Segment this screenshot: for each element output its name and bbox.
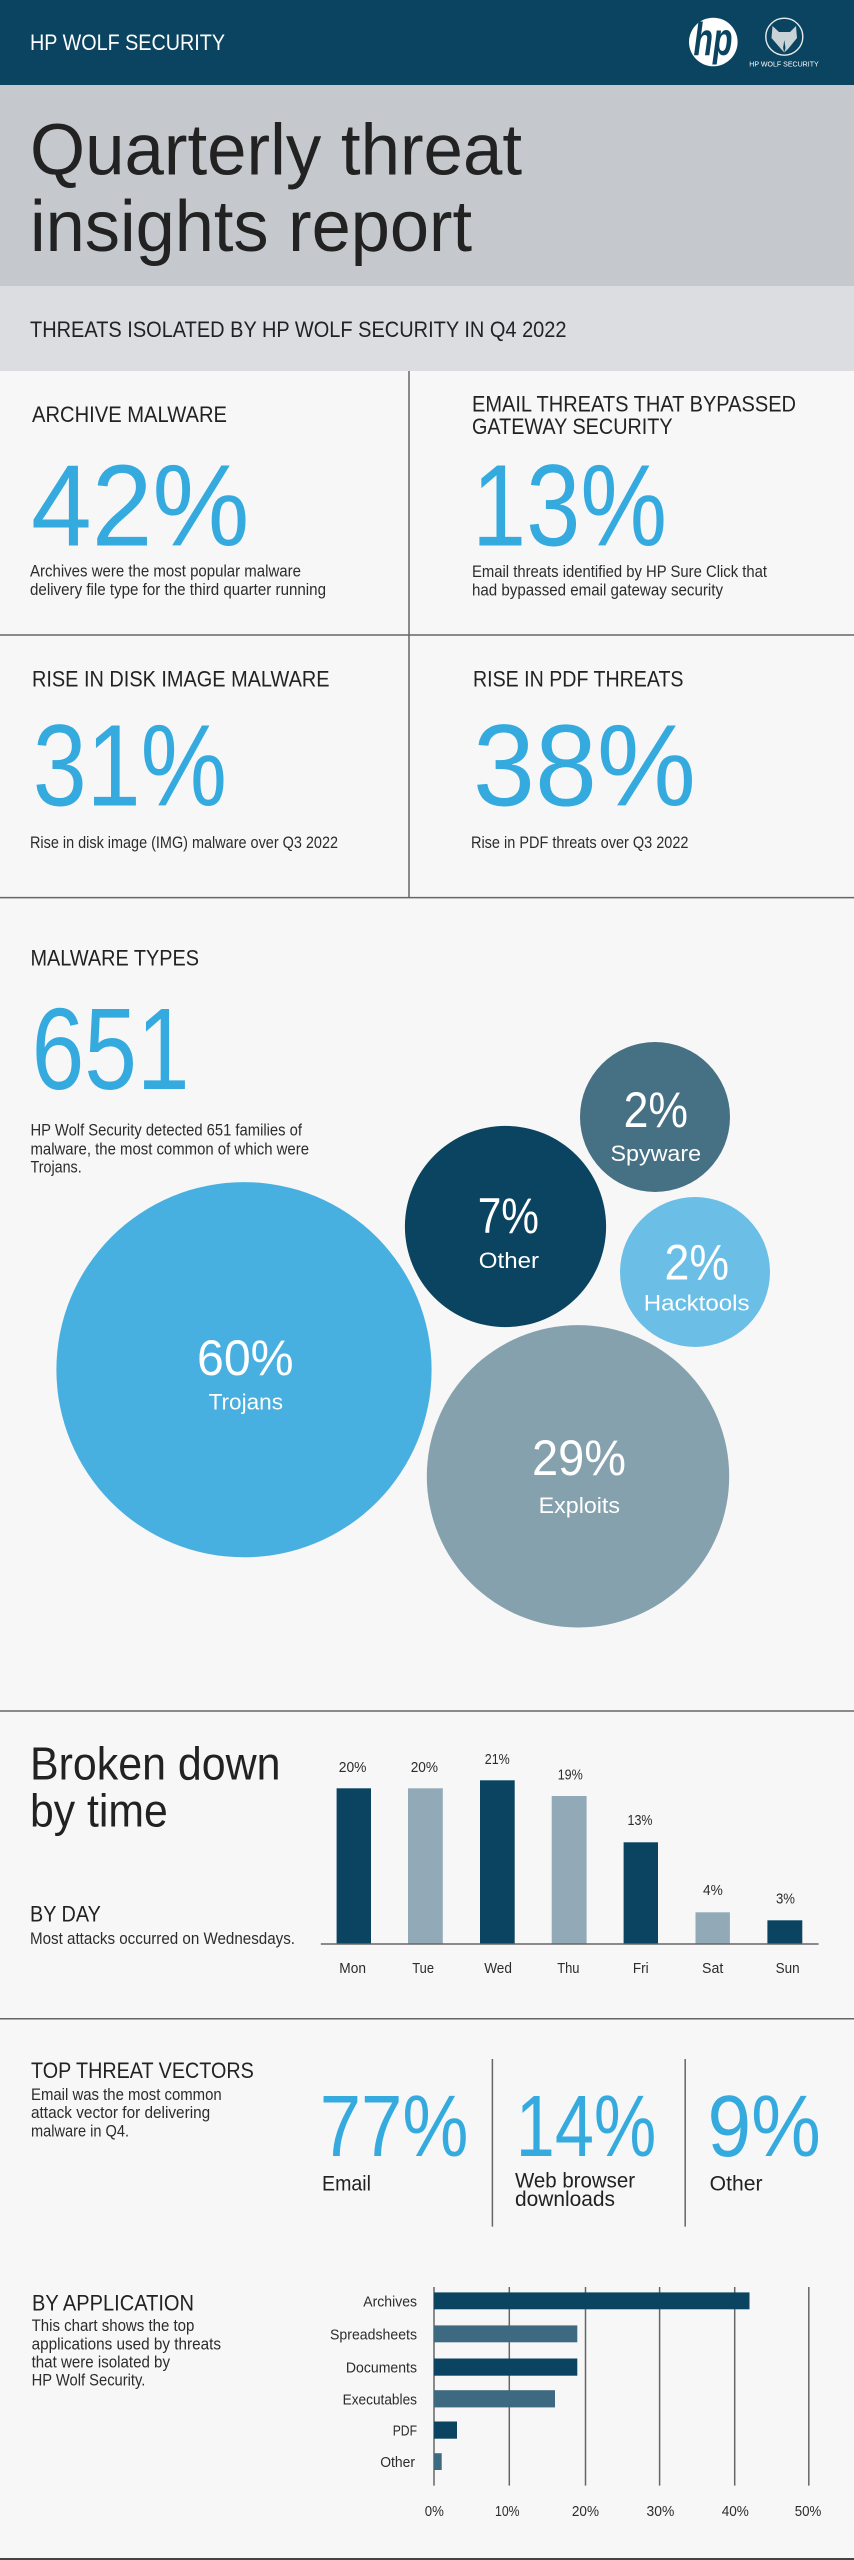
bar chart: attacks by day xyxy=(321,1752,819,1977)
panel: email threats: 13% xyxy=(472,440,667,570)
panel: archive malware: delivery file type for the third quarter running xyxy=(30,581,326,599)
text block: top threat vectors: attack vector for delivering xyxy=(31,2104,210,2122)
bubble: other: 7% xyxy=(478,1188,539,1244)
bar chart: threats by application: 40% xyxy=(722,2504,749,2520)
panel: email threats: GATEWAY SECURITY xyxy=(472,414,673,439)
bar chart: threats by application: 10% xyxy=(495,2504,520,2520)
bar chart: attacks by day: Mon xyxy=(339,1961,366,1977)
stat: web browser downloads 14%: downloads xyxy=(515,2188,615,2211)
bar chart: threats by application: Other xyxy=(380,2455,415,2471)
text block: by application: BY APPLICATION xyxy=(32,2290,194,2315)
panel: malware types intro: malware, the most common of which were xyxy=(30,1140,309,1158)
bar chart: attacks by day: 20% xyxy=(411,1760,438,1776)
panel: disk image malware: RISE IN DISK IMAGE MALWARE xyxy=(32,667,330,692)
bubble: hacktools: 2% xyxy=(664,1234,729,1290)
panel: malware types intro: 651 xyxy=(32,984,190,1114)
stat: web browser downloads 14% xyxy=(515,2078,656,2211)
stat: other 9%: 9% xyxy=(708,2078,821,2175)
panel: disk image malware xyxy=(30,667,338,852)
bar chart: attacks by day: 13% xyxy=(628,1813,653,1829)
title band: Quarterly threat xyxy=(30,111,522,191)
panel: PDF threats: RISE IN PDF THREATS xyxy=(473,667,684,692)
text block: by application xyxy=(32,2290,221,2390)
text block: top threat vectors xyxy=(31,2058,254,2140)
text block: by day: Most attacks occurred on Wednesdays. xyxy=(30,1930,295,1948)
text block: top threat vectors: malware in Q4. xyxy=(31,2122,129,2140)
bar chart: attacks by day: 3% xyxy=(776,1891,795,1907)
title band: insights report xyxy=(30,187,472,267)
bubble: exploits xyxy=(427,1325,729,1628)
icon: HP logo: hp xyxy=(694,13,732,65)
bubble: other xyxy=(405,1126,606,1327)
bubble: hacktools xyxy=(620,1197,770,1347)
bar chart: attacks by day: Thu xyxy=(557,1961,580,1977)
heading: broken down by time: Broken down xyxy=(30,1737,280,1789)
heading: broken down by time xyxy=(30,1737,280,1837)
panel: archive malware: 42% xyxy=(31,440,250,570)
bubble: trojans xyxy=(56,1182,432,1557)
header bar xyxy=(0,0,854,85)
bar chart: threats by application: Spreadsheets xyxy=(330,2328,417,2344)
bubble: spyware xyxy=(580,1042,730,1192)
bar chart: threats by application: 50% xyxy=(795,2504,821,2520)
bubble: exploits: Exploits xyxy=(539,1493,620,1518)
bubble: other: Other xyxy=(479,1248,539,1273)
panel: email threats: Email threats identified by HP Sure Click that xyxy=(472,563,767,581)
bar chart: threats by application xyxy=(330,2287,821,2520)
heading: broken down by time: by time xyxy=(30,1785,168,1837)
panel: malware types intro xyxy=(30,946,309,1177)
bar chart: threats by application: 0% xyxy=(425,2504,444,2520)
text block: top threat vectors: TOP THREAT VECTORS xyxy=(31,2058,254,2083)
panel: malware types intro: Trojans. xyxy=(30,1159,82,1177)
subtitle band: THREATS ISOLATED BY HP WOLF SECURITY IN Q4 2022 xyxy=(30,317,566,342)
text block: by application: This chart shows the top xyxy=(32,2317,194,2335)
bar chart: threats by application: 20% xyxy=(572,2504,599,2520)
panel: disk image malware: Rise in disk image (IMG) malware over Q3 2022 xyxy=(30,834,338,852)
text block: by application: applications used by threats xyxy=(32,2336,221,2354)
panel: malware types intro: MALWARE TYPES xyxy=(30,946,199,971)
text block: by application: that were isolated by xyxy=(32,2354,171,2372)
bubble: spyware: Spyware xyxy=(610,1141,701,1166)
bubble: hacktools: Hacktools xyxy=(644,1291,750,1316)
bar chart: threats by application: 30% xyxy=(646,2504,674,2520)
bubble: trojans: 60% xyxy=(197,1330,294,1386)
text block: top threat vectors: Email was the most common xyxy=(31,2086,222,2104)
bar chart: attacks by day: 21% xyxy=(485,1752,510,1768)
text block: by day: BY DAY xyxy=(30,1902,101,1927)
stat: other 9%: Other xyxy=(710,2172,762,2196)
panel: email threats: had bypassed email gateway security xyxy=(472,582,724,600)
bar chart: threats by application: Executables xyxy=(343,2392,417,2408)
panel: PDF threats xyxy=(471,667,696,852)
bar chart: attacks by day: Sat xyxy=(702,1961,723,1977)
icon: HP Wolf Security logo xyxy=(749,18,819,68)
stat: web browser downloads 14%: Web browser xyxy=(515,2170,635,2193)
panel: email threats xyxy=(472,392,796,600)
stat: web browser downloads 14%: 14% xyxy=(516,2078,656,2175)
bar chart: threats by application: Documents xyxy=(346,2361,417,2377)
subtitle band xyxy=(0,286,854,371)
text block: by day xyxy=(30,1902,295,1948)
icon: HP Wolf Security logo: HP WOLF SECURITY xyxy=(749,62,819,68)
bar chart: threats by application: Archives xyxy=(363,2294,417,2310)
bar chart: attacks by day: 4% xyxy=(703,1883,723,1899)
bubble: spyware: 2% xyxy=(624,1082,688,1138)
bubble: trojans: Trojans xyxy=(209,1390,283,1415)
bar chart: attacks by day: 20% xyxy=(339,1760,367,1776)
title band xyxy=(0,85,854,286)
stat: email 77%: Email xyxy=(322,2172,371,2196)
bubble: exploits: 29% xyxy=(532,1430,626,1486)
bar chart: attacks by day: Tue xyxy=(412,1961,434,1977)
panel: archive malware: Archives were the most popular malware xyxy=(30,563,301,581)
panel: email threats: EMAIL THREATS THAT BYPASSED xyxy=(472,392,796,417)
bar chart: attacks by day: 19% xyxy=(558,1767,583,1783)
bar chart: attacks by day: Wed xyxy=(484,1961,512,1977)
stat: email 77%: 77% xyxy=(320,2078,468,2175)
panel: malware types intro: HP Wolf Security detected 651 families of xyxy=(30,1122,302,1140)
panel: disk image malware: 31% xyxy=(33,701,227,831)
bar chart: threats by application: PDF xyxy=(393,2423,417,2439)
panel: PDF threats: Rise in PDF threats over Q3 2022 xyxy=(471,834,688,852)
panel: PDF threats: 38% xyxy=(473,701,696,831)
bar chart: attacks by day: Fri xyxy=(633,1961,649,1977)
text block: by application: HP Wolf Security. xyxy=(32,2372,145,2390)
panel: archive malware xyxy=(30,402,326,599)
bar chart: attacks by day: Sun xyxy=(776,1961,800,1977)
header bar: HP WOLF SECURITY xyxy=(30,30,225,55)
panel: archive malware: ARCHIVE MALWARE xyxy=(32,402,227,427)
